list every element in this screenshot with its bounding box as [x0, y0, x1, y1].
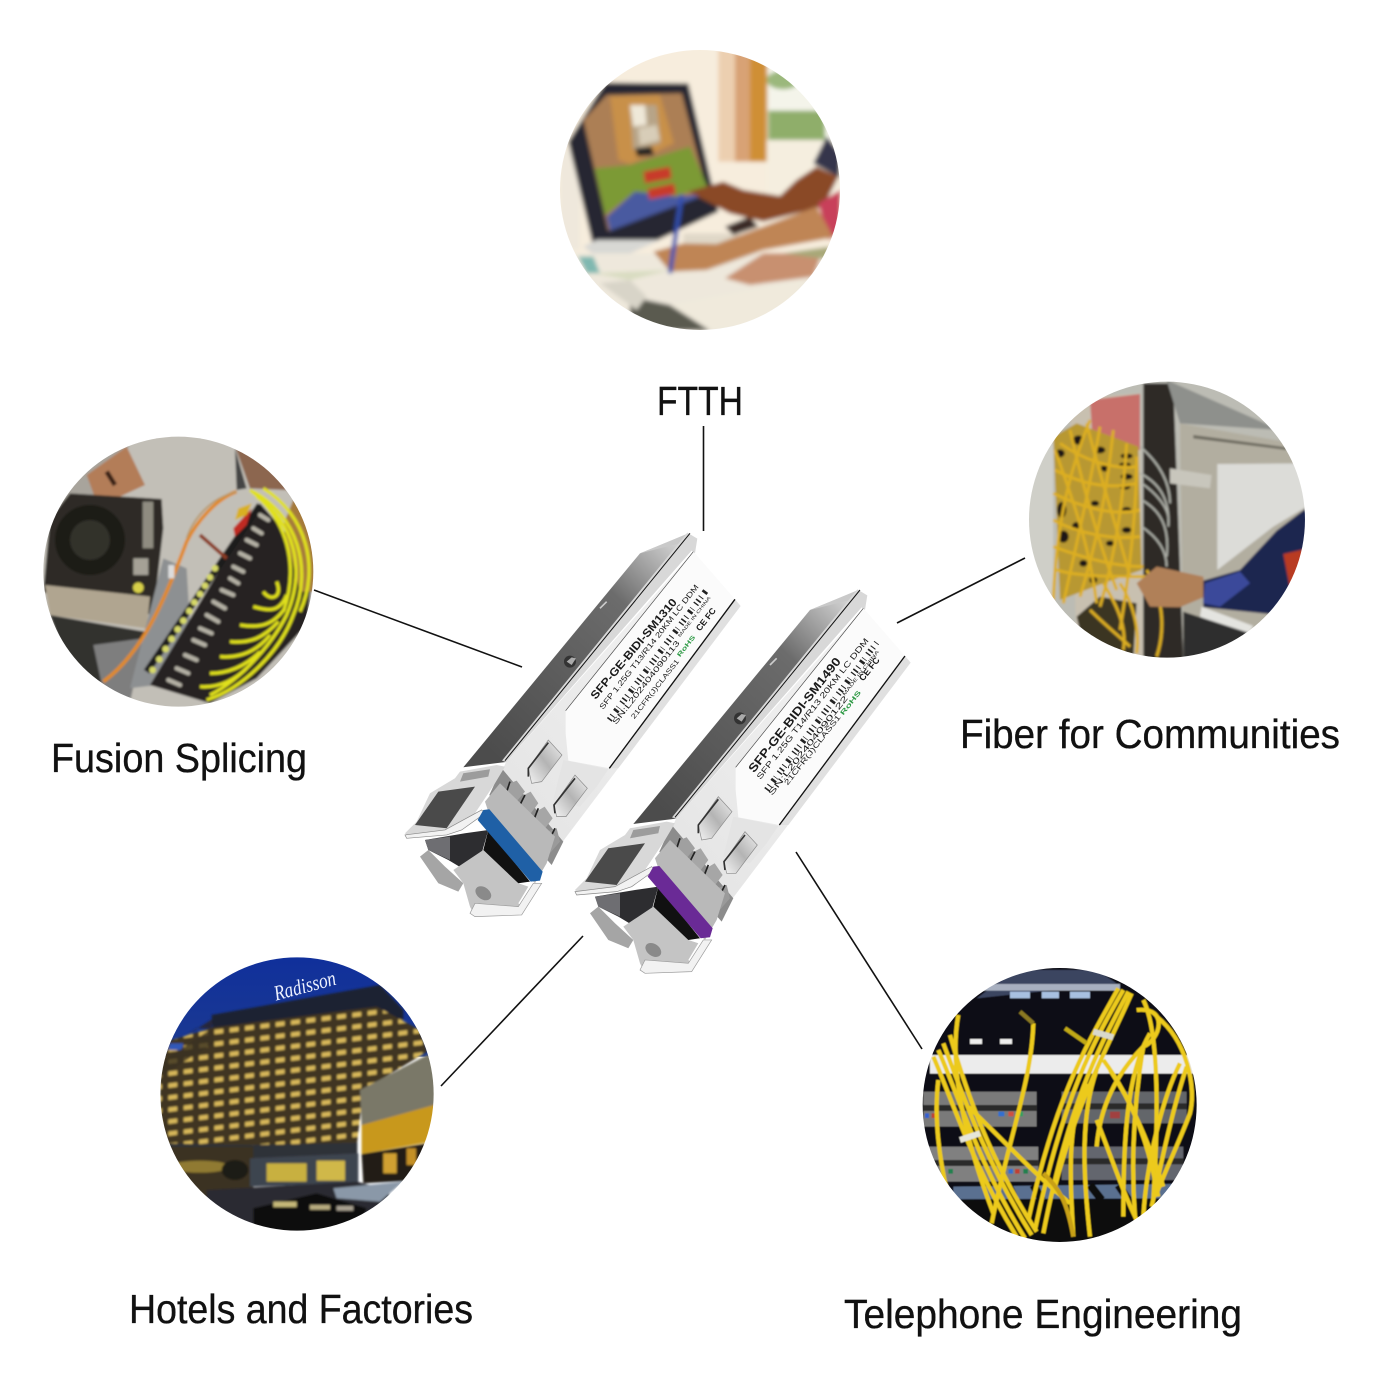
model name: SFP-GE-BIDI-SM1310	[589, 597, 680, 702]
connector line: Fusion Splicing	[314, 590, 522, 667]
made in china: MADE IN CHINA	[677, 595, 712, 638]
photo circle: Telephone Engineering	[922, 968, 1197, 1242]
SFP module: SM1490 purple	[575, 589, 911, 973]
barcode	[609, 591, 706, 720]
photo circle: Hotels and Factories	[160, 957, 434, 1231]
photo circle: Fusion Splicing	[43, 436, 314, 707]
spec line: SFP 1.25G T14/R13 20KM LC DDM	[755, 636, 871, 781]
model name: SFP-GE-BIDI-SM1490	[745, 654, 844, 775]
SFP module: SM1310 blue	[405, 533, 741, 917]
class text: 21CFR(J)CLASS1	[782, 713, 843, 787]
class text: 21CFR(J)CLASS1	[630, 658, 681, 721]
barcode	[767, 643, 877, 790]
spec line: SFP 1.25G T13/R14 20KM LC DDM	[597, 583, 701, 711]
serial number: SN:L202404090122	[766, 693, 850, 797]
CE FC marks: CE FC	[694, 605, 718, 633]
heading: FTTH: FTTH	[657, 378, 743, 424]
photo circle: FTTH	[560, 50, 840, 330]
connector line: Fiber for Communities	[897, 558, 1025, 623]
connector line: Telephone Engineering	[796, 852, 922, 1049]
connector line: FTTH	[702, 426, 704, 531]
blue latch	[478, 809, 543, 882]
connector line: Hotels and Factories	[441, 936, 583, 1086]
heading: Telephone Engineering: Telephone Engineering	[844, 1291, 1242, 1337]
photo circle: Fiber for Communities	[1029, 382, 1305, 658]
purple latch	[648, 866, 713, 938]
RoHS mark: RoHS	[676, 634, 697, 659]
Radisson sign: Radisson	[270, 966, 338, 1006]
CE FC marks: CE FC	[857, 655, 882, 683]
RoHS mark: RoHS	[839, 689, 863, 717]
made in china: MADE IN CHINA	[841, 648, 881, 697]
serial number: SN:L202404090113	[610, 639, 682, 726]
heading: Fusion Splicing: Fusion Splicing	[51, 735, 307, 781]
heading: Hotels and Factories: Hotels and Factories	[129, 1286, 473, 1332]
heading: Fiber for Communities: Fiber for Communities	[960, 711, 1340, 757]
